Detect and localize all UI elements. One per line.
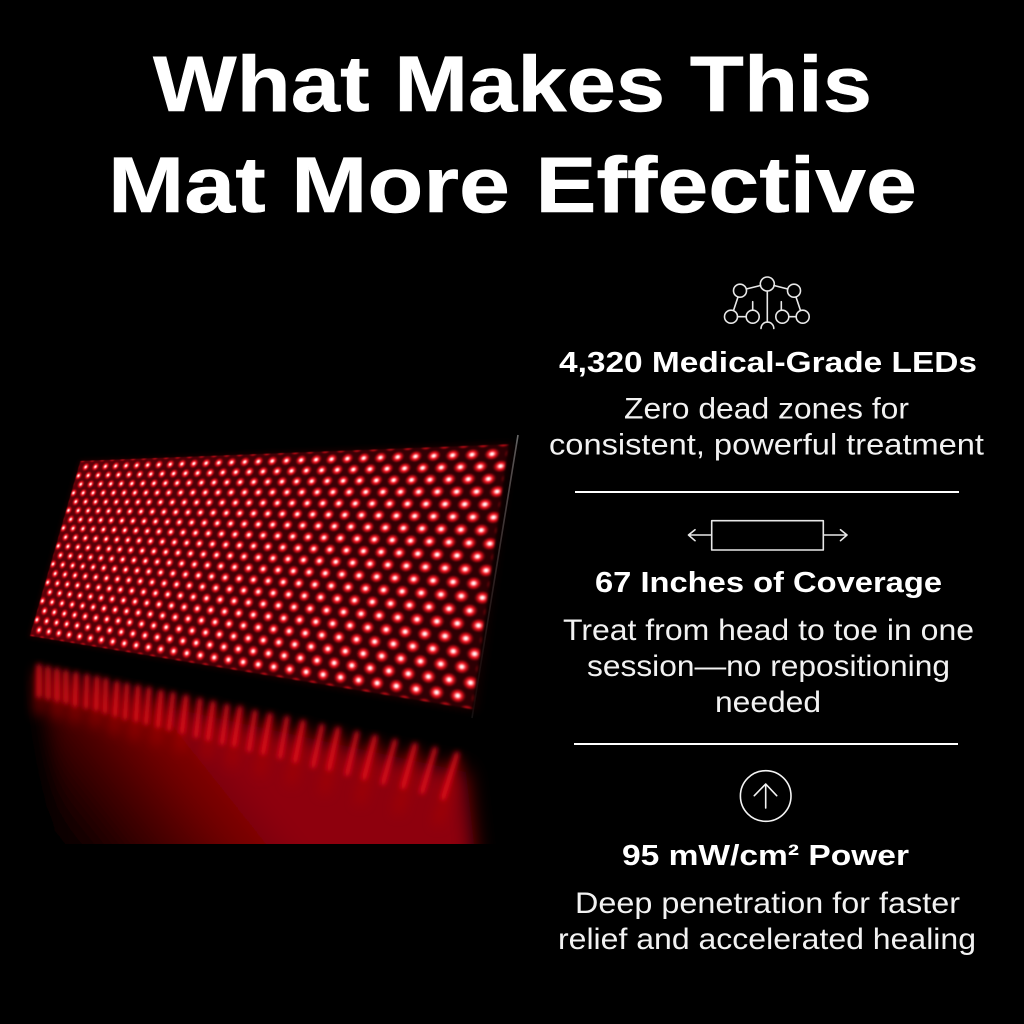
feature: medical-grade LEDs (549, 277, 985, 462)
title (108, 39, 917, 229)
description: needed (715, 686, 821, 719)
title: Mat More Effective (108, 140, 917, 229)
LED panel (28, 442, 517, 712)
feature: power (558, 771, 976, 956)
description (549, 392, 985, 462)
icon: up arrow in circle (740, 771, 791, 821)
heading: 4,320 Medical-Grade LEDs (559, 347, 977, 379)
heading: 95 mW/cm² Power (622, 840, 909, 872)
description: consistent, powerful treatment (549, 428, 985, 462)
icon: length arrows (688, 521, 847, 550)
floor reflection of the mat (26, 434, 519, 844)
feature: coverage (563, 521, 974, 719)
description: relief and accelerated healing (558, 923, 976, 956)
description: session—no repositioning (587, 650, 950, 683)
description: Deep penetration for faster (575, 887, 960, 920)
heading: 67 Inches of Coverage (595, 567, 942, 599)
title: What Makes This (153, 39, 872, 128)
icon: LED network (724, 277, 809, 328)
description: Zero dead zones for (624, 392, 909, 426)
description (558, 887, 976, 956)
description: Treat from head to toe in one (563, 614, 974, 647)
mat side edge (472, 435, 518, 718)
description (563, 614, 974, 719)
illustration: glowing red light mat with reflection (26, 434, 519, 844)
